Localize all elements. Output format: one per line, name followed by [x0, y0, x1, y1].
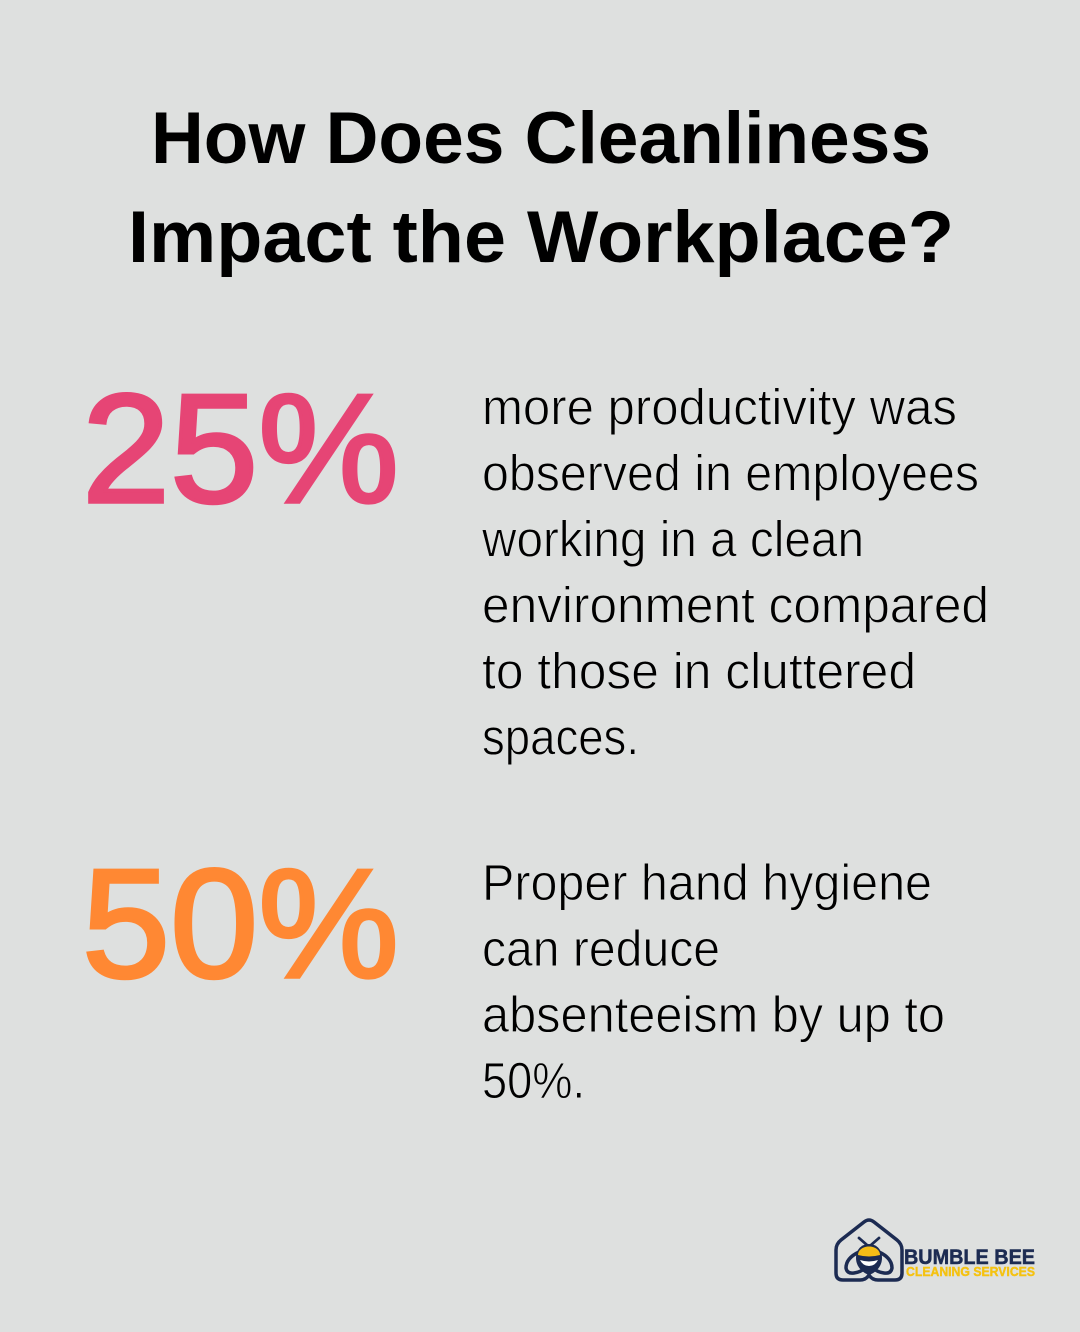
panel: 25% statistic: [82, 362, 989, 766]
logo: Bumble Bee Cleaning Services: [836, 1220, 1035, 1280]
panel: 50% statistic: [82, 837, 945, 1109]
big number: 25%: 25%: [82, 362, 399, 535]
title: [128, 98, 954, 278]
icon: house outline with bee: [836, 1220, 902, 1280]
text block: productivity description: more productivity was: [482, 378, 957, 436]
title: How Does Cleanliness: [151, 98, 931, 179]
big number: 50%: 50%: [82, 837, 399, 1010]
logo tagline: CLEANING SERVICES: [906, 1265, 1035, 1279]
title: Impact the Workplace?: [128, 197, 954, 278]
text block: productivity description: to those in cluttered: [482, 642, 916, 700]
text block: productivity description: observed in employees: [482, 444, 979, 502]
text block: productivity description: working in a clean: [481, 510, 864, 568]
text block: hand hygiene description: absenteeism by up to: [482, 986, 945, 1043]
text block: hand hygiene description: [482, 854, 945, 1109]
text block: productivity description: [481, 378, 989, 766]
text block: productivity description: spaces.: [482, 708, 639, 766]
logo wordmark: BUMBLE BEE: [904, 1246, 1035, 1269]
text block: productivity description: environment compared: [482, 576, 989, 634]
text block: hand hygiene description: Proper hand hygiene: [482, 854, 932, 911]
text block: hand hygiene description: 50%.: [482, 1052, 585, 1109]
text block: hand hygiene description: can reduce: [482, 920, 720, 977]
